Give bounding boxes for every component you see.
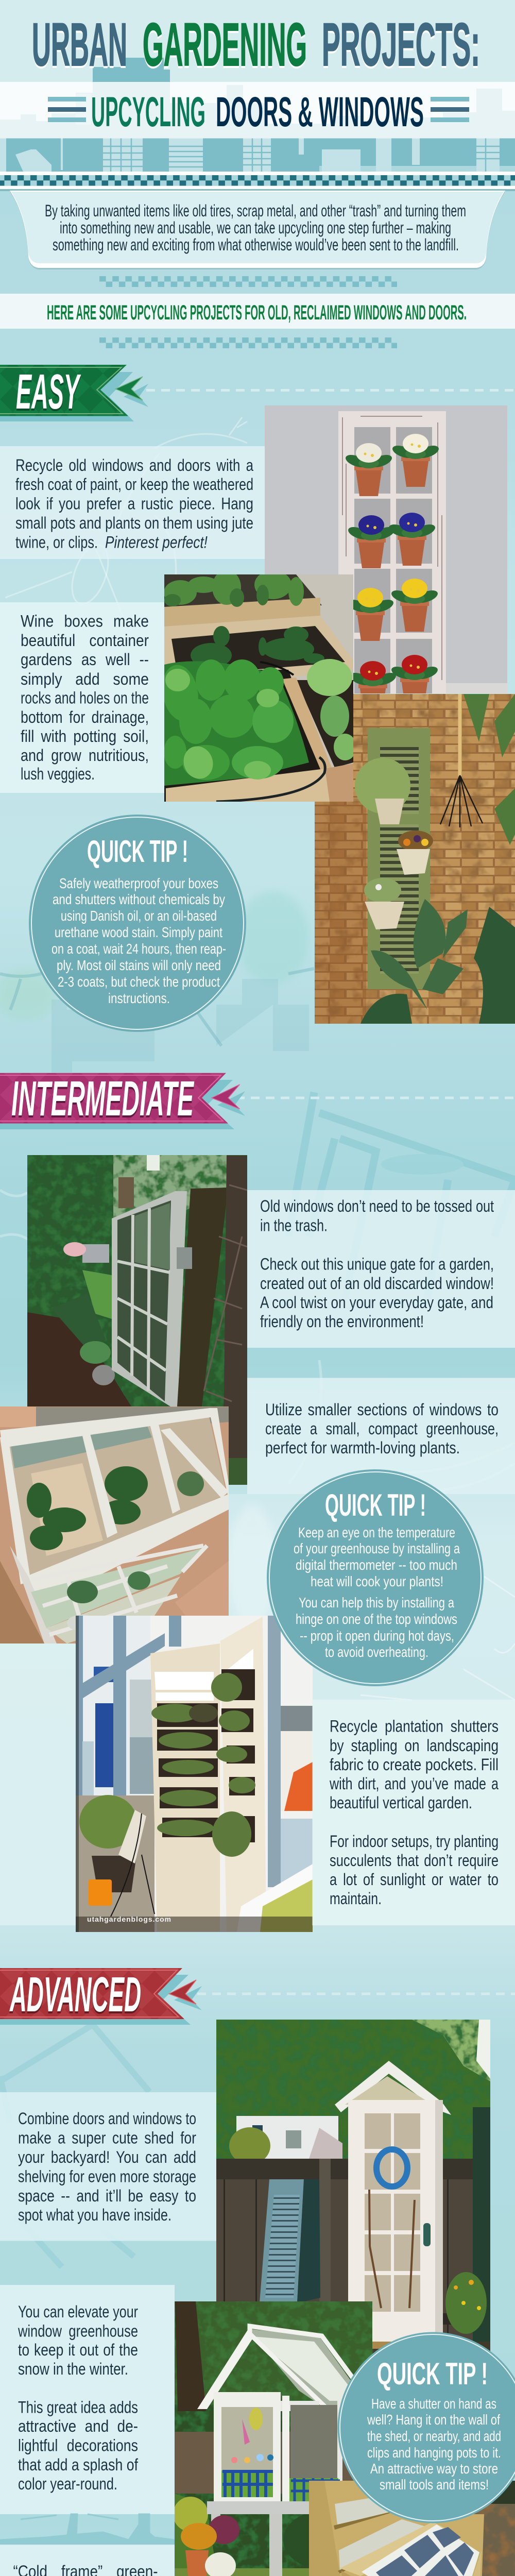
text panel: elevated greenhouse: that add a splash of bbox=[18, 2455, 138, 2474]
white band bbox=[0, 82, 515, 138]
decorative swirl watermark bbox=[0, 1190, 515, 1490]
quick tip circle 2: digital thermometer -- too much bbox=[296, 1557, 457, 1573]
house bbox=[236, 2116, 338, 2159]
bars left of subtitle bbox=[48, 97, 86, 122]
text panel: elevated greenhouse bbox=[0, 2285, 175, 2514]
text panel: shed: shelving for even more storage bbox=[18, 2167, 196, 2185]
quick tip circle 2 bbox=[267, 1469, 484, 1686]
text panel: wine boxes: and grow nutritious, bbox=[21, 746, 149, 765]
text panel: elevated greenhouse: color year-round. bbox=[18, 2475, 117, 2493]
lawn, ground and car bbox=[82, 1270, 112, 1319]
text panel: smaller sections bbox=[247, 1378, 515, 1494]
title bbox=[32, 11, 480, 79]
quick tip circle 2: heat will cook your plants! bbox=[311, 1573, 443, 1589]
strawberry plants bbox=[27, 1466, 204, 1550]
subheading band bbox=[0, 294, 515, 329]
quick tip circle 2: -- prop it open during hot days, bbox=[300, 1628, 454, 1643]
skyline illustration bbox=[0, 58, 515, 172]
text panel: wine boxes: Wine boxes make bbox=[21, 612, 149, 631]
header sky bbox=[0, 0, 515, 172]
shutters bbox=[150, 1643, 220, 1931]
text panel: recycle windows bbox=[0, 446, 265, 559]
photo: window shed bbox=[216, 2020, 490, 2354]
quick tip circle 2: to avoid overheating. bbox=[325, 1644, 428, 1660]
quick tip circle 1 bbox=[29, 815, 246, 1032]
text panel: wine boxes bbox=[0, 602, 164, 793]
text panel: elevated greenhouse: You can elevate your bbox=[18, 2302, 138, 2321]
text panel: plantation shutters bbox=[312, 1700, 515, 1925]
text panel: recycle windows: twine, or clips. bbox=[15, 533, 98, 551]
text panel: plantation shutters: beautiful vertical garden. bbox=[330, 1793, 472, 1812]
text panel left under greenhouse bbox=[0, 1643, 76, 1925]
second box bbox=[164, 616, 353, 690]
text panel: shed bbox=[0, 2092, 216, 2241]
text panel: elevated greenhouse: snow in the winter. bbox=[18, 2360, 128, 2378]
text panel: shed: Combine doors and windows to bbox=[18, 2109, 196, 2128]
glass panes bbox=[8, 1414, 227, 1582]
quick tip circle 2: Keep an eye on the temperature bbox=[298, 1524, 455, 1540]
wood side bbox=[341, 2571, 455, 2576]
chevron bbox=[212, 1084, 240, 1109]
ribbon: intermediate bbox=[0, 1071, 245, 1129]
fence bbox=[216, 2159, 490, 2481]
photo: brick wall shutter bbox=[315, 694, 515, 1024]
quick tip circle 1: QUICK TIP ! bbox=[87, 834, 188, 869]
white frame bars bbox=[0, 1408, 229, 1597]
decorative foliage texture bbox=[229, 1494, 515, 1700]
netting and flowers bbox=[473, 2107, 490, 2481]
vignette bbox=[76, 1917, 313, 1932]
text panel: recycle windows: look if you prefer a rustic piece. Hang bbox=[15, 495, 253, 513]
text panel: shed: spot what you have inside. bbox=[18, 2206, 171, 2224]
text panel: old windows: in the trash. bbox=[260, 1216, 328, 1234]
text panel: wine boxes: simply add some bbox=[21, 670, 149, 688]
quick tip circle 1: and shutters without chemicals by bbox=[53, 891, 225, 907]
plants in rear box bbox=[164, 570, 304, 606]
text panel: elevated greenhouse: lightful decorations bbox=[18, 2436, 138, 2454]
quick tip circle 2: hinge on one of the top windows bbox=[296, 1611, 457, 1627]
gate window frame bbox=[112, 1191, 187, 1406]
greenhouse roof bbox=[247, 2329, 372, 2411]
dashed line intermediate bbox=[236, 1096, 515, 1099]
post and fence wood bbox=[177, 1188, 228, 1406]
table bbox=[237, 1864, 313, 1932]
ribbon: advanced bbox=[0, 1967, 202, 2025]
text panel: wine boxes: beautiful container bbox=[21, 631, 149, 650]
tree silhouette band bbox=[0, 2514, 175, 2545]
text panel: recycle windows: Recycle old windows and doors with a bbox=[15, 456, 253, 474]
text panel: elevated greenhouse: window greenhouse bbox=[18, 2321, 138, 2340]
photo: mini greenhouse bbox=[175, 2301, 372, 2576]
bars right of subtitle bbox=[431, 97, 469, 122]
plant and easel bbox=[79, 1795, 137, 1849]
mums bbox=[209, 2515, 239, 2544]
checker divider bbox=[0, 172, 515, 191]
quick tip circle 3: small tools and items! bbox=[380, 2477, 489, 2493]
text panel: elevated greenhouse: to keep it out of the bbox=[18, 2341, 138, 2359]
photo: window with hanging pots bbox=[265, 405, 507, 693]
quick tip circle 1: 2-3 coats, but check the product bbox=[58, 974, 220, 990]
quick tip circle 2: QUICK TIP ! bbox=[325, 1488, 426, 1522]
photo: wine box planters bbox=[164, 574, 353, 802]
intro text bbox=[45, 201, 466, 254]
dashed line easy bbox=[146, 389, 515, 392]
quick tip circle 1: Safely weatherproof your boxes bbox=[59, 875, 218, 891]
quick tip circle 1: using Danish oil, or an oil-based bbox=[61, 908, 217, 924]
decorative tree and city watermark bbox=[0, 891, 314, 1073]
title: URBAN bbox=[32, 11, 127, 79]
text panel: wine boxes: lush veggies. bbox=[21, 765, 95, 783]
lettuce mass bbox=[164, 661, 309, 786]
decorative frames advanced bbox=[0, 2025, 149, 2267]
window sash bbox=[362, 2524, 479, 2576]
text panel: smaller sections: perfect for warmth-loving plants. bbox=[265, 1438, 460, 1457]
ribbon: easy: EASY bbox=[16, 364, 81, 419]
intro panel bbox=[10, 191, 505, 269]
quick tip circle 3 bbox=[338, 2332, 515, 2523]
chevron bbox=[115, 377, 143, 400]
text panel: old windows: friendly on the environment! bbox=[260, 1312, 424, 1331]
shed bbox=[335, 2061, 451, 2115]
text panel: shed: your backyard! You can add bbox=[18, 2148, 196, 2166]
text panel: recycle windows: small pots and plants on them using jute bbox=[15, 514, 253, 532]
chevron bbox=[169, 1980, 196, 2004]
platform and legs bbox=[283, 2509, 376, 2571]
text panel: recycle windows: Pinterest perfect! bbox=[105, 533, 208, 551]
text panel: recycle windows: fresh coat of paint, or keep the weathered bbox=[15, 475, 253, 494]
text panel: wine boxes: rocks and holes on the bbox=[21, 688, 149, 707]
quick tip circle 2: of your greenhouse by installing a bbox=[294, 1540, 460, 1556]
photo: window gate bbox=[27, 1155, 247, 1485]
quick tip circle 1: on a coat, wait 24 hours, then reap- bbox=[52, 941, 226, 957]
greenhouse walls bbox=[290, 2405, 341, 2503]
text panel: shed: make a super cute shed for bbox=[18, 2129, 196, 2147]
decorative garden tool watermark bbox=[5, 417, 247, 618]
photo: small window greenhouse bbox=[0, 1406, 229, 1643]
front soil and boxes bbox=[164, 670, 335, 802]
decorative window frames watermark bbox=[288, 1092, 515, 1298]
quick tip circle 2: You can help this by installing a bbox=[299, 1595, 454, 1611]
text panel: elevated greenhouse: This great idea adds bbox=[18, 2398, 138, 2416]
photo: cold frame bbox=[309, 2481, 515, 2576]
text panel: cold frame bbox=[0, 2545, 309, 2576]
subtitle: UPCYCLING bbox=[91, 89, 205, 135]
text panel: plantation shutters: maintain. bbox=[330, 1889, 382, 1908]
quick tip circle 1: urethane wood stain. Simply paint bbox=[55, 924, 222, 940]
dashed line advanced bbox=[197, 1993, 515, 1995]
small checker strip bbox=[99, 337, 397, 348]
lower frame bbox=[10, 1546, 57, 1643]
photo: plantation shutters bbox=[76, 1616, 313, 1932]
text panel: wine boxes: gardens as well -- bbox=[21, 650, 149, 669]
glass and window frame bbox=[76, 1616, 150, 1811]
lettuce right bbox=[307, 659, 356, 760]
photo caption: utahgardenblogs.com bbox=[87, 1915, 171, 1923]
quick tip circle 1: instructions. bbox=[108, 990, 170, 1006]
title: GARDENING bbox=[143, 11, 307, 79]
quick tip circle 1: ply. Most oil stains will only need bbox=[57, 957, 221, 973]
text panel: shed: space -- and it’ll be easy to bbox=[18, 2187, 196, 2205]
text panel: wine boxes: bottom for drainage, bbox=[21, 708, 149, 726]
ribbon: intermediate: INTERMEDIATE bbox=[11, 1071, 194, 1126]
text panel: wine boxes: fill with potting soil, bbox=[21, 727, 149, 745]
ribbon: advanced: ADVANCED bbox=[9, 1967, 141, 2022]
text panel: old windows bbox=[247, 1190, 515, 1348]
lettuce left bbox=[158, 659, 294, 780]
blue shutter bbox=[260, 2179, 304, 2303]
text panel: elevated greenhouse: attractive and de- bbox=[18, 2417, 138, 2435]
header bbox=[0, 0, 515, 172]
small checker strip bbox=[99, 276, 397, 287]
